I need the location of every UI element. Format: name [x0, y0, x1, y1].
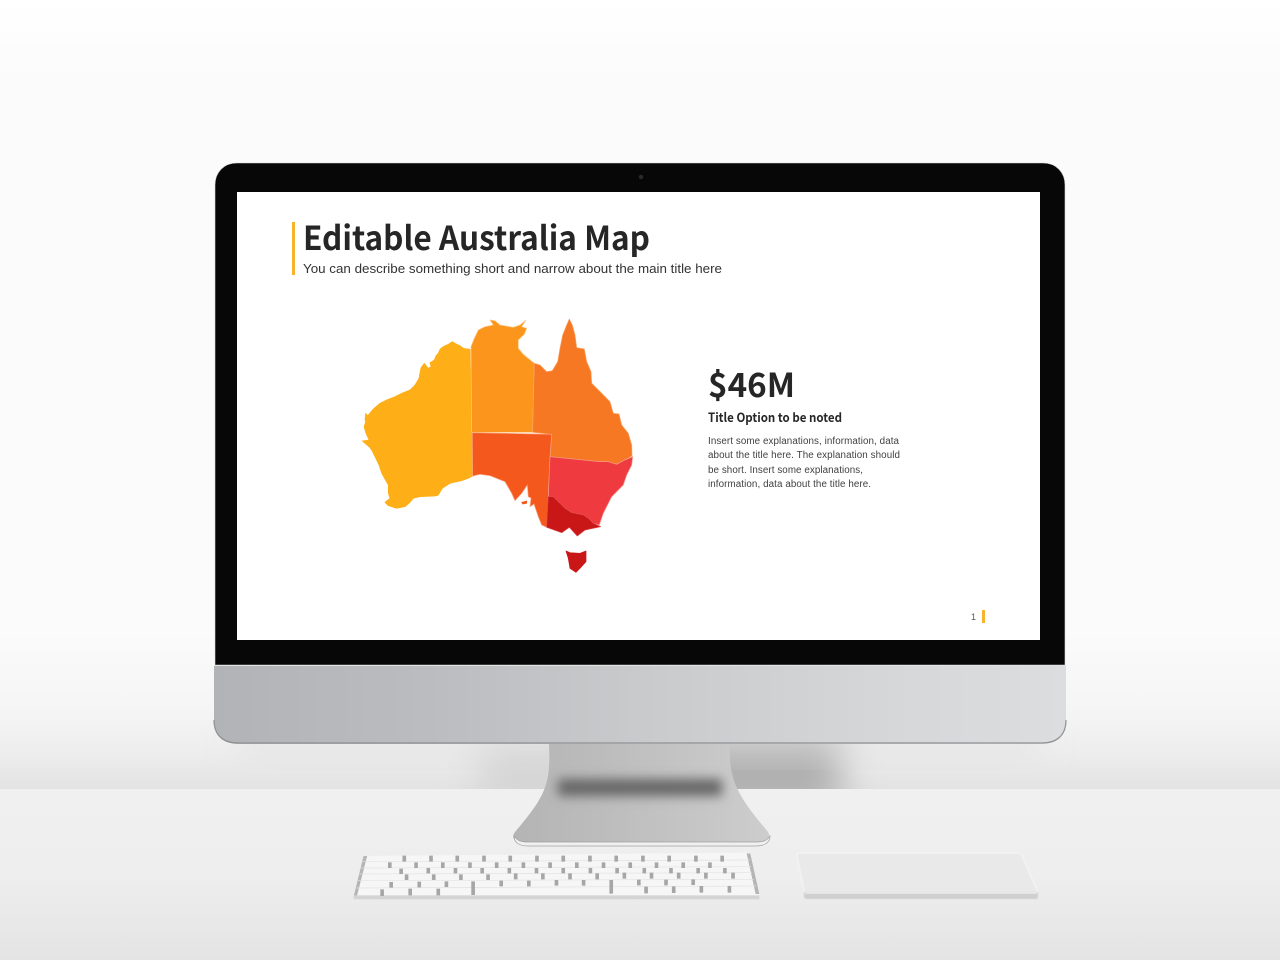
- map: Australia states: [362, 319, 633, 572]
- page number: [971, 610, 985, 623]
- state: Northern Territory: [471, 320, 534, 432]
- subtitle: You can describe something short and narrow about the main title here: [303, 261, 722, 276]
- keyboard key gaps: [380, 856, 735, 896]
- slide title block: [292, 212, 722, 276]
- trackpad: [797, 853, 1038, 899]
- monitor bezel: [215, 163, 1065, 665]
- stat description: Insert some explanations, information, data: [708, 436, 900, 447]
- wall shadow behind stand: [468, 744, 866, 789]
- monitor: [214, 163, 1066, 744]
- stat description: information, data about the title here.: [708, 479, 871, 490]
- keyboard: [354, 853, 759, 899]
- state: Victoria: [547, 497, 601, 536]
- stat callout: [708, 359, 900, 490]
- stat value: $46M: [708, 359, 795, 407]
- keyboard row lines: [356, 860, 756, 888]
- state: Kangaroo Island: [522, 501, 527, 504]
- screen: [237, 192, 1040, 640]
- state: Tasmania: [566, 551, 586, 572]
- state: Western Australia: [362, 342, 473, 508]
- monitor chin: [214, 665, 1066, 744]
- monitor stand: [513, 744, 770, 846]
- background: desk: [0, 789, 1280, 960]
- stat description: [708, 436, 900, 490]
- title accent bar: [292, 222, 295, 275]
- stat description: be short. Insert some explanations,: [708, 465, 863, 476]
- stat description: about the title here. The explanation should: [708, 450, 900, 461]
- state: Queensland: [533, 319, 632, 464]
- state: South Australia: [472, 433, 552, 527]
- state: New South Wales: [548, 457, 633, 525]
- title: Editable Australia Map: [303, 212, 650, 260]
- keyboard body: [354, 853, 759, 899]
- stat title: Title Option to be noted: [708, 407, 842, 426]
- page number: 1: [971, 612, 976, 622]
- camera: [639, 175, 643, 179]
